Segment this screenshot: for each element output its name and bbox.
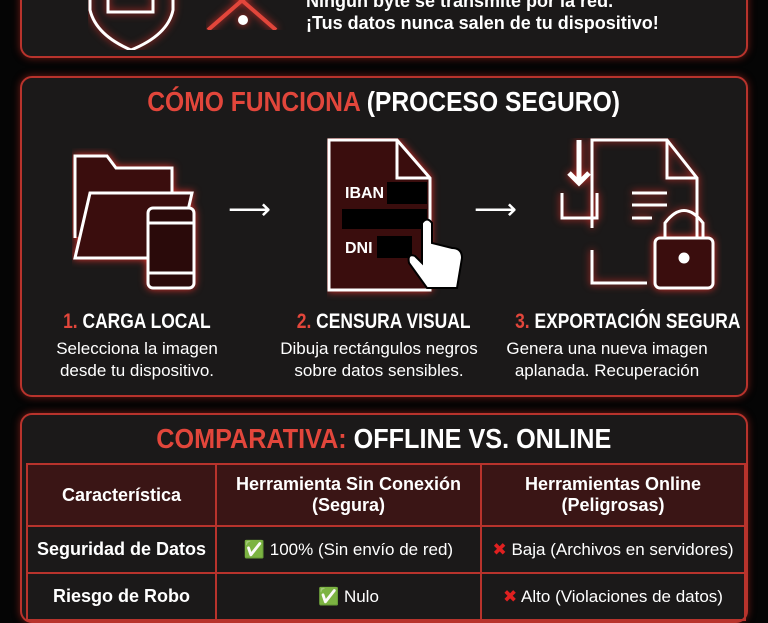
step 2: Dibuja rectángulos negros <box>280 339 478 358</box>
step 1: Selecciona la imagen <box>56 339 218 358</box>
panel: privacy <box>20 0 748 58</box>
icon: folder and phone <box>72 148 202 296</box>
icon: shield <box>88 0 181 50</box>
step 3: aplanada. Recuperación <box>515 361 699 380</box>
step 2: sobre datos sensibles. <box>294 361 464 380</box>
comparison table: ✅ Nulo <box>318 586 379 606</box>
comparison table: (Peligrosas) <box>561 495 665 515</box>
heading: CÓMO FUNCIONA (PROCESO SEGURO) <box>148 86 620 117</box>
comparison table: (Segura) <box>312 495 385 515</box>
icon: document redaction <box>327 138 463 298</box>
step 3: Genera una nueva imagen <box>506 339 708 358</box>
step 2 <box>280 310 478 380</box>
panel: comparison <box>20 413 748 623</box>
comparison table: Característica <box>62 484 181 504</box>
step 1: desde tu dispositivo. <box>60 361 214 380</box>
comparison table: Herramienta Sin Conexión <box>236 474 461 494</box>
icon: export and lock <box>554 138 721 296</box>
step 3 <box>506 309 740 380</box>
heading: COMPARATIVA: OFFLINE VS. ONLINE <box>156 423 611 454</box>
comparison table: Herramientas Online <box>525 474 701 494</box>
panel: how it works <box>20 76 748 397</box>
step 1 <box>56 310 218 380</box>
comparison table: ✅ 100% (Sin envío de red) <box>244 540 453 558</box>
comparison table: Seguridad de Datos <box>37 539 206 559</box>
arrow 1: ⟶ <box>228 193 271 226</box>
step 2: 2. CENSURA VISUAL <box>297 310 470 333</box>
comparison table: ✖ Baja (Archivos en servidores) <box>492 540 734 558</box>
comparison table: Riesgo de Robo <box>53 586 190 606</box>
step 1: 1. CARGA LOCAL <box>63 310 211 333</box>
text: privacy message: ¡Tus datos nunca salen de tu dispositivo! <box>306 13 659 33</box>
comparison table: ✖ Alto (Violaciones de datos) <box>503 586 723 606</box>
icon: document redaction: IBAN <box>345 185 384 202</box>
icon: document redaction: DNI <box>345 240 373 257</box>
comparison table <box>26 463 746 621</box>
text: privacy message <box>306 0 659 33</box>
icon: no network <box>206 0 281 30</box>
step 3: 3. EXPORTACIÓN SEGURA <box>515 310 740 333</box>
arrow 2: ⟶ <box>474 193 517 226</box>
